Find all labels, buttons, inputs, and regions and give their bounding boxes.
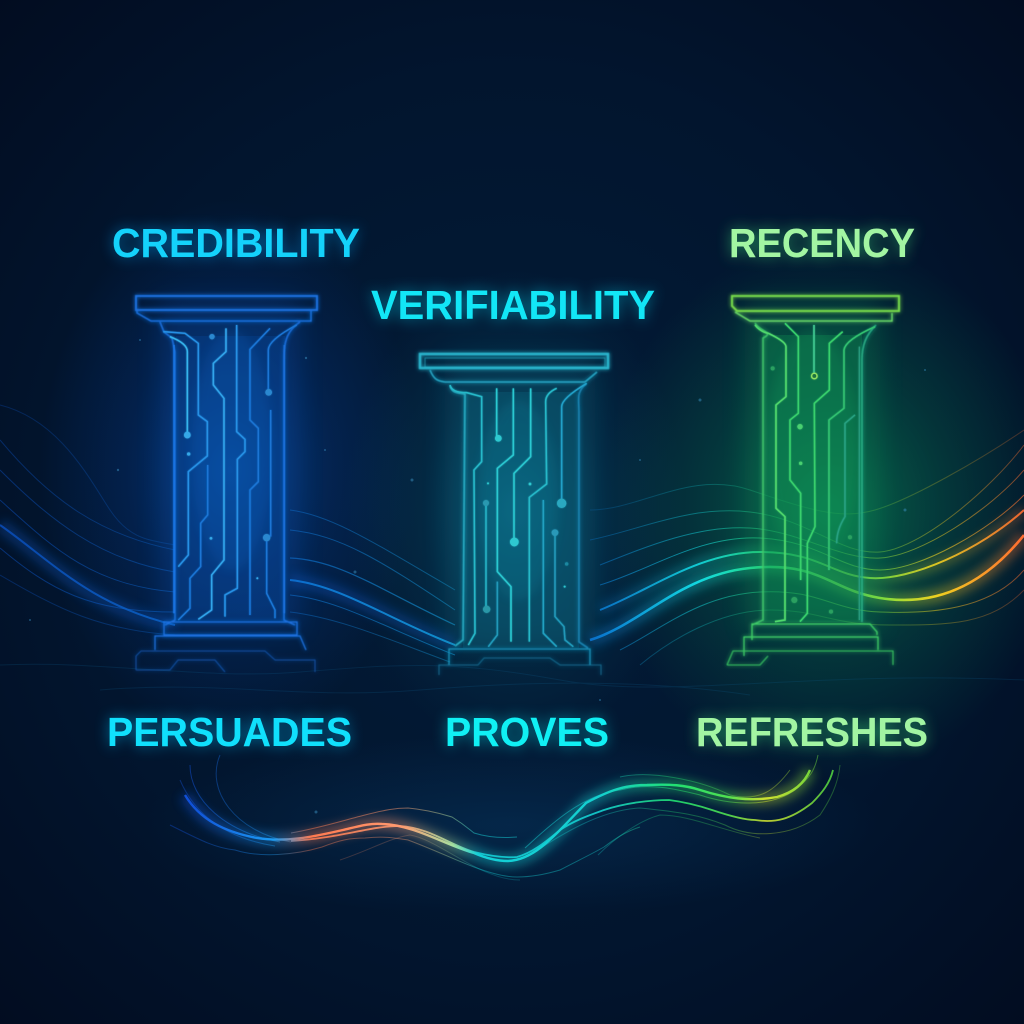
pillar 3 outline bbox=[727, 296, 899, 665]
label glows: CREDIBILITY bbox=[112, 220, 360, 266]
pillar 3: recency bbox=[727, 296, 899, 665]
label glows: REFRESHES bbox=[696, 709, 928, 755]
base circuit traces bbox=[0, 664, 1024, 695]
pillar 2 circuit traces bbox=[450, 383, 587, 647]
pillar 2 outline bbox=[420, 354, 608, 675]
label: refreshes: REFRESHES bbox=[696, 709, 928, 755]
label glows: VERIFIABILITY bbox=[371, 282, 655, 328]
wave lines: left side bbox=[0, 405, 455, 662]
wave glow: right side bbox=[590, 535, 1024, 640]
heading: credibility: CREDIBILITY bbox=[112, 220, 360, 266]
wave lines: right side bbox=[590, 430, 1024, 665]
pillar 2 body fill bbox=[463, 392, 579, 648]
label: proves: PROVES bbox=[445, 709, 609, 755]
bottom wave second bright line bbox=[291, 770, 833, 857]
bottom wave bbox=[170, 755, 840, 880]
pillar 1 halo bbox=[160, 300, 300, 630]
pillar 2: verifiability bbox=[420, 354, 608, 675]
pillar 1 body fill bbox=[176, 336, 285, 622]
pillar 2 halo bbox=[445, 358, 595, 648]
bottom wave bright line bbox=[185, 770, 810, 861]
heading: recency: RECENCY bbox=[729, 220, 915, 266]
pillar 1 outline bbox=[136, 296, 317, 672]
pillar 1 circuit traces bbox=[163, 325, 297, 620]
pillar 1: credibility bbox=[136, 296, 317, 672]
label glows: PROVES bbox=[445, 709, 609, 755]
heading: verifiability: VERIFIABILITY bbox=[371, 282, 655, 328]
bottom wave faint lines bbox=[170, 755, 840, 880]
speckle particles bbox=[29, 339, 926, 814]
bottom wave glow bbox=[185, 770, 810, 861]
label glows: RECENCY bbox=[729, 220, 915, 266]
label: persuades: PERSUADES bbox=[107, 709, 352, 755]
wave glow: left side bbox=[0, 525, 455, 645]
pillar 3 circuit traces bbox=[755, 323, 875, 622]
label glows bbox=[107, 220, 928, 755]
flowing waves behind pillars bbox=[0, 405, 1024, 665]
label glows: PERSUADES bbox=[107, 709, 352, 755]
pillar 3 halo bbox=[745, 300, 880, 630]
pillar 3 body fill bbox=[763, 335, 862, 622]
